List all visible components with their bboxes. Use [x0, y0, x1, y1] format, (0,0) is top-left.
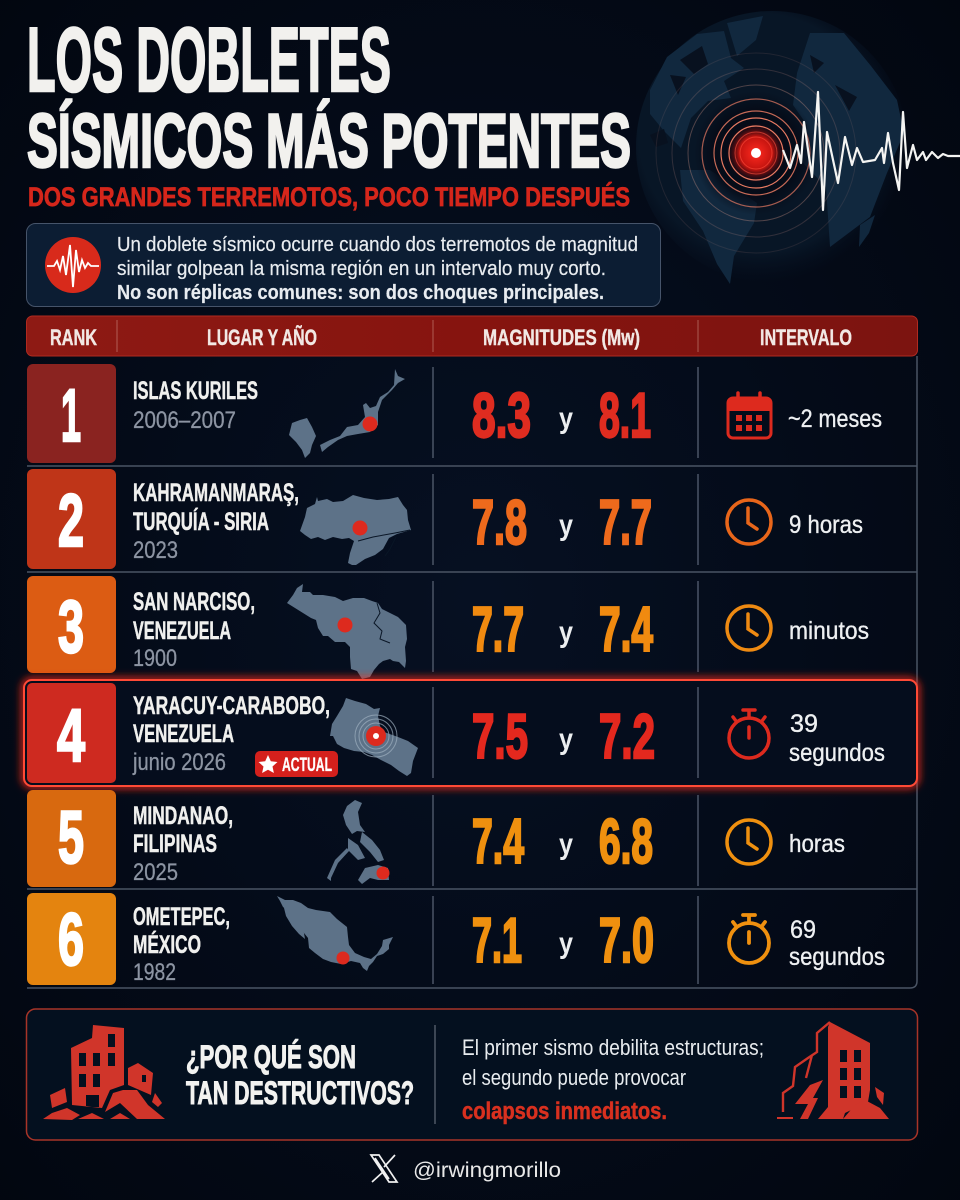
- row 1: Islas Kuriles: ISLAS KURILES: [133, 377, 258, 405]
- row 5: Mindanao: 2025: [133, 859, 178, 886]
- row 5: Mindanao: 6.8: [599, 807, 653, 877]
- row 2: Kahramanmaraş: 2023: [133, 537, 178, 564]
- map: México: [277, 896, 393, 971]
- row 2: Kahramanmaraş: KAHRAMANMARAŞ,: [133, 479, 299, 507]
- panel: definition: [26, 224, 660, 306]
- row 3: San Narciso: 3: [58, 585, 84, 668]
- heading: por qué: ¿POR QUÉ SON: [186, 1039, 356, 1075]
- row 2: Kahramanmaraş: TURQUÍA - SIRIA: [133, 507, 269, 536]
- row 6: Ometepec: segundos: [789, 943, 885, 971]
- row 3: San Narciso: SAN NARCISO,: [133, 588, 255, 616]
- row 4: Yaracuy-Carabobo (highlighted): 39: [790, 710, 818, 738]
- row 5: Mindanao: [27, 790, 845, 887]
- row 6: Ometepec: 6: [58, 898, 84, 981]
- row 6: Ometepec: OMETEPEC,: [133, 903, 230, 931]
- map: Filipinas: [327, 800, 390, 884]
- row 2: Kahramanmaraş: 7.7: [599, 488, 652, 558]
- icon: collapsed building: [43, 1025, 165, 1120]
- row 4: Yaracuy-Carabobo (highlighted): junio 2026: [132, 749, 226, 776]
- explanation text: [462, 1035, 764, 1125]
- table header: RANK: [50, 325, 97, 350]
- row 4: Yaracuy-Carabobo (highlighted): y: [559, 723, 573, 756]
- icon: clock: [727, 500, 771, 544]
- panel: por qué son tan destructivos: [26, 1009, 918, 1140]
- row 2: Kahramanmaraş: 7.8: [472, 488, 527, 558]
- icon: cracked building with lightning: [777, 1022, 889, 1119]
- table header: LUGAR Y AÑO: [207, 325, 317, 350]
- row 2: Kahramanmaraş: 9 horas: [789, 511, 863, 539]
- row 6: Ometepec: y: [559, 927, 573, 960]
- row 4: Yaracuy-Carabobo (highlighted): segundos: [789, 739, 885, 767]
- row 3: San Narciso: [27, 576, 869, 679]
- subtitle: DOS GRANDES TERREMOTOS, POCO TIEMPO DESPUÉS: [28, 181, 630, 212]
- row 4: Yaracuy-Carabobo (highlighted): VENEZUELA: [133, 720, 234, 748]
- explanation text: El primer sismo debilita estructuras;: [462, 1035, 764, 1060]
- row 1: Islas Kuriles: y: [559, 402, 573, 435]
- row 4: Yaracuy-Carabobo (highlighted): 7.2: [599, 702, 655, 772]
- row 5: Mindanao: y: [559, 828, 573, 861]
- map: Kuriles: [289, 369, 405, 458]
- map: Turquía y Siria: [300, 495, 411, 565]
- row 5: Mindanao: MINDANAO,: [133, 802, 233, 830]
- panel: definition: No son réplicas comunes: son dos choques principales.: [117, 281, 604, 304]
- row 5: Mindanao: horas: [789, 830, 845, 858]
- row 1: Islas Kuriles: 2006–2007: [133, 407, 236, 434]
- icon: stopwatch: [729, 710, 769, 758]
- icon: calendar: [728, 393, 771, 438]
- row 3: San Narciso: 1900: [133, 645, 177, 672]
- row 4: Yaracuy-Carabobo (highlighted): 4: [57, 694, 85, 777]
- row 6: Ometepec: [27, 893, 885, 986]
- row 3: San Narciso: minutos: [789, 617, 869, 645]
- table frame lines: [27, 356, 917, 988]
- table header: [26, 316, 918, 356]
- explanation text: colapsos inmediatos.: [462, 1098, 667, 1125]
- map: Venezuela: [287, 584, 407, 679]
- row 5: Mindanao: 5: [58, 796, 84, 879]
- heading: por qué: TAN DESTRUCTIVOS?: [186, 1075, 414, 1111]
- row 2: Kahramanmaraş: [27, 469, 863, 569]
- badge: actual: ACTUAL: [282, 755, 332, 776]
- row 6: Ometepec: 1982: [133, 959, 176, 986]
- icon: stopwatch: [729, 915, 769, 963]
- row 3: San Narciso: 7.4: [599, 595, 653, 665]
- title: LOS DOBLETES: [27, 10, 391, 111]
- row 3: San Narciso: y: [559, 616, 573, 649]
- row 5: Mindanao: 7.4: [472, 807, 524, 877]
- row 2: Kahramanmaraş: y: [559, 509, 573, 542]
- title: [27, 10, 631, 184]
- explanation text: el segundo puede provocar: [462, 1065, 686, 1090]
- icon: clock: [727, 820, 771, 864]
- table header: INTERVALO: [760, 325, 852, 350]
- row 4: Yaracuy-Carabobo (highlighted): [24, 680, 917, 786]
- heading: por qué: [186, 1039, 414, 1111]
- badge: actual: [255, 751, 338, 777]
- panel: definition: similar golpean la misma región en un intervalo muy corto.: [117, 257, 606, 280]
- row 3: San Narciso: 7.7: [472, 595, 524, 665]
- icon: clock: [727, 606, 771, 650]
- row 3: San Narciso: VENEZUELA: [133, 617, 231, 645]
- row 1: Islas Kuriles: [27, 364, 882, 463]
- row 1: Islas Kuriles: ~2 meses: [788, 405, 882, 433]
- row 1: Islas Kuriles: 8.1: [599, 381, 651, 451]
- footer: handle: @irwingmorillo: [413, 1159, 561, 1182]
- icon: seismic wave: [45, 237, 101, 293]
- row 4: Yaracuy-Carabobo (highlighted): YARACUY-CARABOBO,: [133, 692, 330, 720]
- row 4: Yaracuy-Carabobo (highlighted): 7.5: [472, 702, 528, 772]
- row 1: Islas Kuriles: 8.3: [472, 381, 531, 451]
- row 6: Ometepec: 7.1: [472, 906, 522, 976]
- table header: MAGNITUDES (Mw): [483, 325, 640, 350]
- footer: handle: [371, 1155, 561, 1182]
- row 6: Ometepec: 69: [790, 916, 816, 944]
- panel: definition: Un doblete sísmico ocurre cuando dos terremotos de magnitud: [117, 233, 638, 256]
- row 6: Ometepec: MÉXICO: [133, 930, 201, 959]
- map: Yaracuy-Carabobo epicentre: [330, 698, 418, 776]
- globe with epicentre and seismogram: [636, 11, 960, 284]
- row 6: Ometepec: 7.0: [599, 906, 654, 976]
- row 5: Mindanao: FILIPINAS: [133, 830, 217, 858]
- row 2: Kahramanmaraş: 2: [58, 479, 84, 562]
- row 1: Islas Kuriles: 1: [61, 374, 81, 457]
